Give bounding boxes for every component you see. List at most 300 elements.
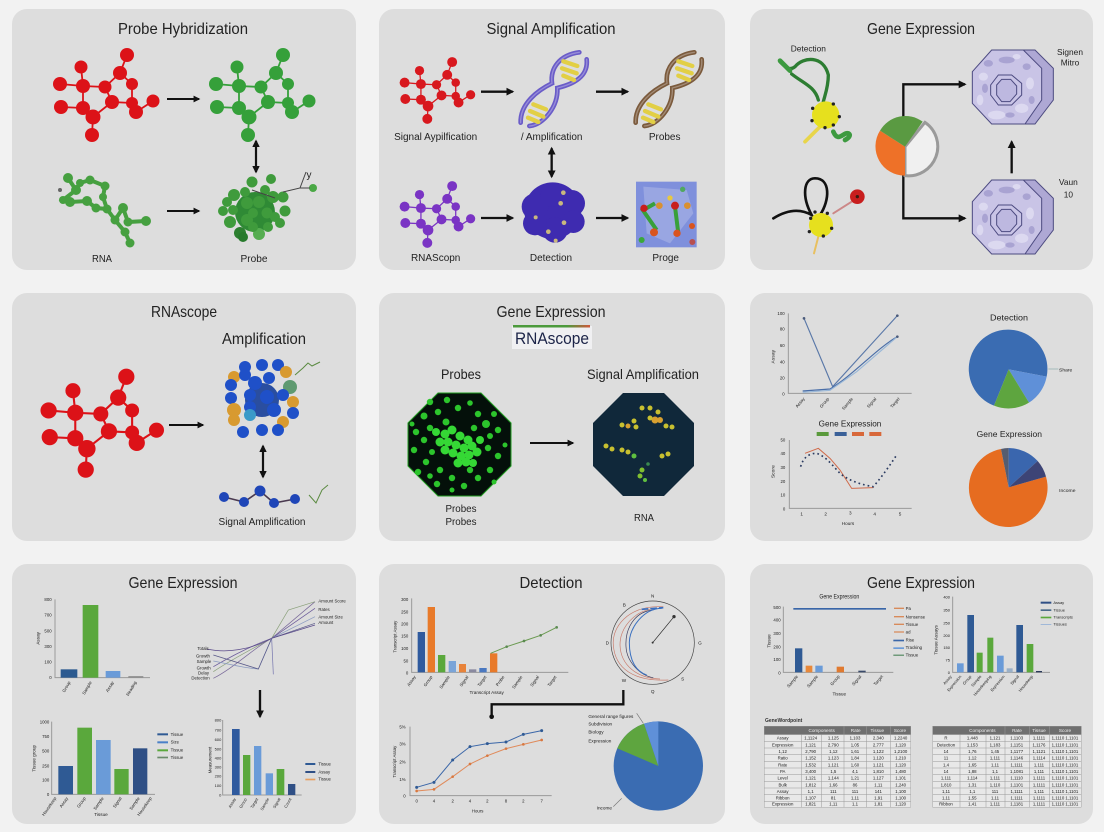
title: Gene Expression: Gene Expression <box>128 575 238 592</box>
chart: bars with line: Signal <box>529 675 540 687</box>
heading: Amplification: Amplification <box>222 331 306 348</box>
table: left: 1,127 <box>873 776 884 781</box>
table: left: Expression <box>772 742 794 747</box>
table: right: 1,11 <box>942 789 951 794</box>
chart: bars top left <box>35 597 150 697</box>
table: right: 1,1110 1,1101 <box>1052 802 1079 807</box>
chart: bars top left: Reading <box>125 680 138 697</box>
table: left: 1,1 <box>852 802 859 807</box>
chart: two-series line: 4 <box>469 798 472 803</box>
legend: chart b <box>1041 600 1073 627</box>
table: left: 1,21 <box>851 776 860 781</box>
panel: line charts and pie charts <box>750 293 1093 541</box>
chart: line chart: 0 <box>782 392 785 397</box>
chart: radial plot: G <box>698 640 702 645</box>
labels: under micrographs: RNA <box>634 512 654 524</box>
legend: chart b: Tissue <box>1053 607 1066 612</box>
chart: two-series line: 0 <box>415 798 418 803</box>
table: right: 1,153 <box>967 742 978 747</box>
chart: two-series line: 5% <box>399 724 406 729</box>
table: right: 1,810 <box>941 782 952 787</box>
table: right: 1,31 <box>968 782 977 787</box>
chart: bars bottom right: Signal <box>272 797 282 809</box>
chart: bars with line: 100 <box>401 646 409 651</box>
chart: bars bottom right: 700 <box>215 728 222 733</box>
icon: black loop probe <box>773 178 865 253</box>
table: left: 141 <box>875 789 883 794</box>
table: right: 1,111 <box>1034 762 1045 767</box>
table: right: 1,1110 <box>1010 776 1024 781</box>
table: right: 1,11 <box>991 762 1000 767</box>
table: right: 1,76 <box>968 749 977 754</box>
legend: bottom left: Size <box>171 740 180 745</box>
chart: bars with top line: Sample <box>786 674 799 689</box>
chart: fan lines top right: Totals <box>197 646 209 651</box>
label: RNA: RNA <box>92 254 112 265</box>
labels: Signal Aypilfication <box>394 132 477 143</box>
heading: Detection: Detection <box>990 313 1028 323</box>
labels: Probes <box>649 132 680 143</box>
molecule: purple small <box>400 181 475 248</box>
panel: Probe Hybridization <box>12 9 356 270</box>
chart: line chart: 60 <box>780 343 785 348</box>
icon: purple helix <box>521 52 587 126</box>
chart: bars bottom left: Housekeep <box>136 796 153 817</box>
chart: blue pie: Income <box>597 805 612 810</box>
table: right: 1,1114 <box>1033 756 1046 761</box>
chart: bars b: 250 <box>943 620 951 625</box>
table: right: 1,110 <box>990 782 1001 787</box>
chart: bars b: Signal <box>1009 674 1020 686</box>
table: left: 1,100 <box>895 789 907 794</box>
chart: bars bottom left <box>31 719 155 817</box>
table: left: 1,152 <box>805 756 817 761</box>
table: left: 1,144 <box>828 776 839 781</box>
title: RNAscope: RNAscope <box>151 304 217 321</box>
heading: Probes: Probes <box>441 366 481 382</box>
chart: bars bottom right <box>207 718 302 811</box>
table: right: 111 <box>992 789 999 794</box>
table: right: 1,45 <box>991 749 1000 754</box>
chart: dotted line chart: 20 <box>781 479 786 484</box>
legend: chart a: ad <box>906 630 911 635</box>
chart: bars b: Assay <box>942 674 953 686</box>
chart: bars with line: Sample <box>511 674 524 690</box>
icon: purple blob <box>522 182 585 243</box>
title: Signal Amplification: Signal Amplification <box>486 21 616 38</box>
small label: y: y <box>306 170 312 181</box>
table: right: 1,11 <box>991 796 1000 801</box>
legend: bottom left: Tissue <box>171 732 184 737</box>
chart: bars with line: Target <box>546 674 558 687</box>
chart: bars with top line: Group <box>829 674 841 687</box>
chart: bars bottom left: Group <box>76 796 87 809</box>
chart: bars b: 350 <box>943 608 951 613</box>
chart: fan lines top right: Sample <box>197 659 212 664</box>
chart: dotted line chart: 40 <box>781 451 786 456</box>
pie icon <box>875 116 938 176</box>
labels: under micrographs <box>446 503 654 528</box>
legend: bottom left <box>157 732 184 760</box>
labels <box>394 132 680 264</box>
table: right: 1,111 <box>1034 769 1045 774</box>
micrograph: yellow signal <box>593 393 694 496</box>
chart: bars top left: 300 <box>44 644 52 649</box>
table: left: Assay <box>777 789 789 794</box>
table: right: Score <box>1059 728 1071 733</box>
table: left: 86 <box>853 782 858 787</box>
chart: blue pie: General range figures <box>588 714 634 719</box>
chart: bars b: Expression <box>946 674 962 692</box>
table: right: R <box>944 736 948 741</box>
chart: two-series line: 0 <box>403 793 406 798</box>
chart: bars b: 150 <box>943 645 951 650</box>
table: left: 1,121 <box>805 742 817 747</box>
chart: line chart: 20 <box>780 376 785 381</box>
chart: fan lines top right: Growth <box>197 665 211 670</box>
arrow: down <box>256 690 263 717</box>
labels: Mitro <box>1061 58 1080 68</box>
table: right: 1,1110 1,1101 <box>1052 776 1079 781</box>
table: right: 1,183 <box>990 742 1001 747</box>
table: right: 1,1081 <box>1010 769 1024 774</box>
chart: bars bottom right: Count <box>283 796 293 809</box>
chart: two-series line: 4 <box>433 798 436 803</box>
table: right: 1,1101 <box>1010 782 1024 787</box>
legend: chart a: Tissue <box>906 622 919 627</box>
table: right <box>933 726 1081 807</box>
legend: chart a: Nonsense <box>906 614 926 619</box>
chart: two-series line: 8 <box>505 798 508 803</box>
chart: bars bottom left: Assay <box>58 795 70 809</box>
chart: bars b: 75 <box>946 658 951 663</box>
table: left: 1,2240 <box>894 736 908 741</box>
chart: bars with top line: Gene Expression <box>819 593 860 600</box>
chart: line chart: Group <box>819 396 830 409</box>
label: Signal Amplification: Signal Amplification <box>218 516 306 528</box>
chart: bars bottom right: Target <box>249 796 260 809</box>
chart: detection pie: Share <box>1059 367 1073 373</box>
table: left: 2,777 <box>873 742 884 747</box>
labels: Proge <box>652 253 679 264</box>
table: left: 1,120 <box>895 802 907 807</box>
chart: bars with line: Transcript Assay <box>470 690 504 695</box>
chart: radial plot: W <box>622 678 627 683</box>
chart: bars with line: Transcript Assay <box>393 620 398 653</box>
chart: bars bottom right: 400 <box>215 756 222 761</box>
chart: line chart: Sample <box>841 396 854 411</box>
arrow: double vertical <box>262 446 264 477</box>
chart: bars with top line: Tissue <box>833 692 847 697</box>
table: left: Level <box>777 776 788 781</box>
chart: two-series line: Transcript Assay <box>392 745 397 778</box>
chart: fan lines top right: Amount Size <box>318 614 343 619</box>
chart: fan lines top right: Growth <box>196 653 211 658</box>
chart: bars with top line <box>767 593 893 697</box>
chart: bars b: Sample <box>970 673 983 688</box>
heading: Gene Expression: Gene Expression <box>977 429 1042 439</box>
table: right: 1,111 <box>941 776 952 781</box>
icon: tissue tile <box>636 182 697 247</box>
table: right: 1,1110 1,1101 <box>1052 749 1079 754</box>
table: right: 1,1110 1,1101 <box>1052 769 1079 774</box>
legend: chart b: Assay <box>1053 600 1064 605</box>
table: right: 1,1110 1,1101 <box>1052 789 1079 794</box>
chart: blue pie: Expression <box>588 738 612 743</box>
table: left: Assay <box>777 736 789 741</box>
table: left: 1,12 <box>829 749 838 754</box>
arrow: double vertical <box>255 141 257 172</box>
chart: bars with line: Probe <box>495 674 506 687</box>
table: right: 14 <box>944 769 949 774</box>
table: right: 1,55 <box>968 796 977 801</box>
chart: bars with top line: Tissue <box>767 634 772 648</box>
table: right: 14 <box>944 749 949 754</box>
panel: RNAscope <box>12 293 356 541</box>
table: right: 1,1111 <box>1033 782 1046 787</box>
legend: chart b: Tissues <box>1053 622 1067 627</box>
table: right: 1,1 <box>969 789 976 794</box>
table: left: 1,121 <box>828 762 839 767</box>
chart: dotted line chart <box>771 419 912 526</box>
chart: bars with line: Sample <box>438 674 451 690</box>
chart: line chart: Assay <box>794 396 806 409</box>
chart: two-series line: 7 <box>540 798 543 803</box>
arrow: RNA to probe <box>167 210 199 212</box>
table: right: 1,11 <box>942 796 951 801</box>
table: right: 1,1111 <box>1033 736 1046 741</box>
chart: bars b: 400 <box>943 594 951 599</box>
table: left: 1,61 <box>851 749 860 754</box>
table: right: 1,1111 <box>1033 802 1046 807</box>
table: left: 1,107 <box>805 796 817 801</box>
table: right: 1,1176 <box>1033 742 1046 747</box>
table: left: 3,400 <box>805 769 817 774</box>
chart: blue pie: Subdivision <box>588 722 613 727</box>
legend: bottom left: Tissue <box>171 747 184 752</box>
table: left: Bulk <box>778 782 788 787</box>
chart: bars with line: Assay <box>406 674 417 687</box>
table: right: Rate <box>1012 728 1022 733</box>
table: left: 1,1 <box>808 789 814 794</box>
molecule: red probe <box>53 48 160 142</box>
panel: Signal Amplification <box>379 9 725 270</box>
table: right: 1,12 <box>968 756 977 761</box>
table: right: 1,1111 <box>1011 762 1023 767</box>
chart: bars b: Housekeeping <box>972 674 992 697</box>
table: right: 1,88 <box>968 769 977 774</box>
micrograph: green probes <box>408 393 511 496</box>
chart: line chart <box>770 311 912 411</box>
table: right: 1,111 <box>1034 789 1045 794</box>
table: left: 1,100 <box>895 796 907 801</box>
chart: bars top left: 100 <box>44 659 52 664</box>
table: right: 1,448 <box>967 736 978 741</box>
table: right: 1,111 <box>990 756 1001 761</box>
table: left: 1,810 <box>873 769 884 774</box>
table: right: 1,4 <box>943 762 950 767</box>
title: Gene Expression: Gene Expression <box>867 575 975 592</box>
chart: two-series line: 2 <box>522 798 525 803</box>
chart: bars bottom right: Measurement <box>207 746 212 773</box>
chart: bars b: Expression <box>989 674 1006 692</box>
chart: radial plot: B <box>623 603 626 608</box>
table: right: 1,1177 <box>1010 749 1024 754</box>
chart: bars bottom left: 1000 <box>40 719 50 724</box>
chart: line chart: 100 <box>777 311 785 316</box>
table: left: 1,210 <box>895 756 907 761</box>
chart: bars b: 200 <box>943 633 951 638</box>
chart: radial plot: N <box>651 594 654 599</box>
chart: dotted line chart: Hours <box>842 521 855 526</box>
chart: dotted line chart: 50 <box>781 438 786 443</box>
label: Probe: Probe <box>240 254 268 265</box>
arrows: flow <box>481 92 628 218</box>
table: right: 1,1 <box>992 769 999 774</box>
molecule: large red <box>40 369 164 478</box>
table: left: 1,60 <box>851 762 860 767</box>
table: left: 1,11 <box>851 796 860 801</box>
table: right: 1,1110 1,1101 <box>1052 782 1079 787</box>
table: left: 2,340 <box>873 736 884 741</box>
chart: bars with top line: 200 <box>773 644 781 649</box>
heading: Signal Amplification: Signal Amplification <box>587 366 699 382</box>
icon: lower octagon <box>972 180 1053 254</box>
chart: bars bottom right: 200 <box>215 774 222 779</box>
table: right: Components <box>969 728 996 733</box>
table: left: 1,121 <box>805 776 817 781</box>
molecule: green probe cluster <box>218 172 317 242</box>
chart: bars with top line: 300 <box>773 631 781 636</box>
table: left: 2,790 <box>828 742 839 747</box>
table: left: 1,122 <box>873 749 884 754</box>
table: left: 1,121 <box>873 762 884 767</box>
chart: two-series line: Hours <box>472 808 483 813</box>
table: left: Components <box>808 728 836 733</box>
chart: bars bottom right: 500 <box>215 746 222 751</box>
labels: Signen <box>1057 47 1083 57</box>
chart: bars bottom left: Housekeep <box>41 796 58 817</box>
chart: blue pie: Biology <box>588 730 604 735</box>
chart: bars bottom right: Sample <box>259 796 271 811</box>
chart: bars b: Tissue Assays <box>933 625 938 655</box>
chart: two-series line: 2% <box>399 759 406 764</box>
table: right: Ribbon <box>939 802 953 807</box>
legend: chart b: Transcripts <box>1053 615 1073 620</box>
table: left: 1,101 <box>895 776 907 781</box>
chart: gene expression pie <box>969 448 1076 527</box>
table: left: 1,120 <box>895 742 907 747</box>
labels: Detection <box>791 43 826 53</box>
labels: under micrographs: Probes <box>446 503 476 515</box>
labels: RNAScopn <box>411 253 460 264</box>
chart: bars bottom left: Sample <box>128 796 141 811</box>
chart: bars with line <box>393 597 568 695</box>
chart: bars top left: 0 <box>49 675 52 680</box>
labels: / Amplification <box>521 132 582 143</box>
chart: bars bottom left: Signal <box>112 796 123 809</box>
chart: bars bottom right: 100 <box>215 783 222 788</box>
chart: bars with top line: Target <box>873 673 885 687</box>
badge: RNAscope: RNAscope <box>515 329 589 348</box>
labels: under micrographs: Probes <box>446 516 476 528</box>
title: Probe Hybridization: Probe Hybridization <box>118 21 248 38</box>
chart: radial plot: Q <box>651 689 655 694</box>
molecule: RNA chain <box>58 173 151 248</box>
chart: bars with line: Group <box>422 674 434 687</box>
connector: elbow <box>489 690 623 719</box>
chart: bars bottom left: Sample <box>92 796 105 811</box>
chart: bars bottom left: 100 <box>42 778 50 783</box>
chart: line chart: Signal <box>866 396 877 409</box>
chart: two-series line: 1% <box>399 777 406 782</box>
chart: bars b: Housekeep <box>1017 674 1035 693</box>
arrow: to cluster <box>169 424 203 426</box>
table: left: 111 <box>852 789 859 794</box>
table: left: Score <box>894 728 906 733</box>
table: left: 1,05 <box>851 742 860 747</box>
chart: bars bottom left: 500 <box>42 749 50 754</box>
legend: bottom right <box>305 762 332 782</box>
table: right: 1,114 <box>967 776 978 781</box>
table: right: 1,1111 <box>1011 789 1023 794</box>
legend: bottom left: Tissue <box>171 755 184 760</box>
chart: bars with top line: Signal <box>851 674 862 687</box>
table: left: 1,81 <box>874 802 883 807</box>
chart: radial plot: D <box>606 640 610 645</box>
table: right: 1,1110 1,1101 <box>1052 796 1079 801</box>
table: right: 1,1103 <box>1010 736 1024 741</box>
table: right: 11 <box>944 756 949 761</box>
chart: bars b: Group <box>961 673 973 686</box>
molecule: blue cluster <box>225 359 320 438</box>
chart: bars top left: 500 <box>44 628 52 633</box>
chart: bars b <box>933 594 1050 697</box>
chart: bars with top line: Sample <box>806 674 819 689</box>
chart: bars bottom left: Tissue group <box>31 745 36 772</box>
table: left: 111 <box>830 789 837 794</box>
chart: bars with line: 0 <box>406 670 409 675</box>
chart: bars top left: Assay <box>105 680 115 693</box>
chart: bars with top line: 0 <box>778 670 781 675</box>
chart: bars b: 0 <box>948 670 951 675</box>
chart: radial plot <box>606 594 702 694</box>
labels: 10 <box>1064 190 1073 200</box>
panel: Gene Expression (RNAscope) <box>379 293 725 541</box>
table: right: 1,1111 <box>1011 796 1023 801</box>
legend: chart a: Rise <box>906 637 915 642</box>
chart: bars bottom left: 0 <box>47 792 50 797</box>
table: left: 2,790 <box>805 749 817 754</box>
chart: bars with line: 300 <box>401 597 409 602</box>
icon: brown helix <box>636 52 702 126</box>
table: left: 1,91 <box>874 796 883 801</box>
chart: bars bottom right: 300 <box>215 764 222 769</box>
chart: bars top left: 700 <box>44 613 52 618</box>
chart: bars top left: Group <box>61 680 72 693</box>
legend: bottom right: Assay <box>318 769 331 774</box>
table: right: 1,121 <box>990 736 1001 741</box>
table: left: 4,1 <box>852 769 859 774</box>
diagram contents <box>394 52 702 264</box>
table: left: 1,123 <box>828 756 839 761</box>
chart: dotted line chart: 2 <box>824 512 827 517</box>
labels: Detection <box>530 253 572 264</box>
chart: line chart: Assay <box>770 349 776 363</box>
chart: bars with top line: 100 <box>773 657 781 662</box>
table: left: Rate <box>851 728 861 733</box>
chart: bars with line: Signal <box>458 675 469 687</box>
